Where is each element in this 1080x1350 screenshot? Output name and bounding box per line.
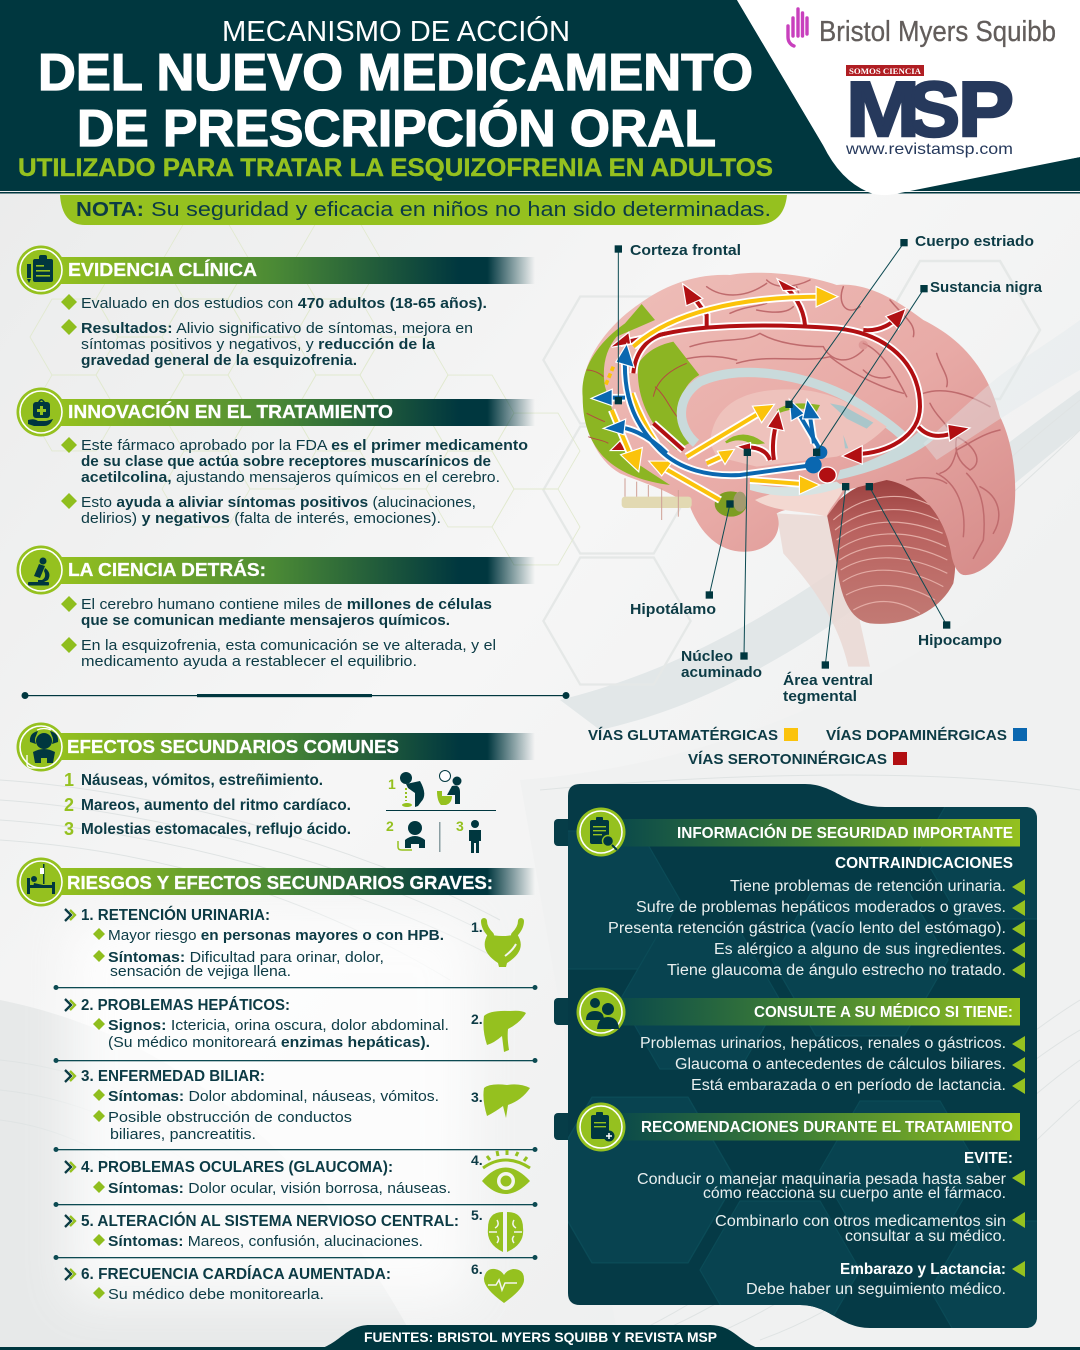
section: recomendaciones: cómo reacciona su cuerpo ante el fármaco. — [703, 1185, 1006, 1202]
icon: liver — [483, 1011, 526, 1052]
risk 6: frecuencia cardíaca: 6. — [471, 1261, 483, 1277]
section: información de seguridad: CONTRAINDICACIONES — [835, 855, 1013, 872]
panel: efectos secundarios comunes: Náuseas, vómitos, estreñimiento. — [81, 772, 323, 789]
icon: gallbladder liver — [483, 1084, 530, 1118]
panel: efectos secundarios comunes: 2 — [64, 795, 74, 815]
icon: clipboard — [27, 255, 53, 283]
brain region labels: Corteza frontal — [630, 242, 741, 259]
risk 3: enfermedad biliar — [65, 1068, 530, 1143]
risk 4: problemas oculares: 4. PROBLEMAS OCULARES (GLAUCOMA): — [81, 1159, 393, 1176]
section: recomendaciones: consultar a su médico. — [845, 1228, 1006, 1245]
risk 4: problemas oculares — [65, 1150, 530, 1197]
panel: efectos secundarios comunes: Mareos, aumento del ritmo cardíaco. — [81, 797, 351, 814]
logo: MSP: www.revistamsp.com — [845, 141, 1013, 158]
red serotonin pathways — [612, 280, 968, 483]
panel: evidencia clínica: síntomas positivos y negativos, y reducción de la — [81, 336, 436, 353]
logo: MSP: M — [846, 65, 920, 153]
section: información de seguridad: INFORMACIÓN DE SEGURIDAD IMPORTANTE — [677, 824, 1013, 842]
icon: bladder — [484, 921, 521, 967]
panel: evidencia clínica: Resultados: Alivio significativo de síntomas, mejora en — [81, 320, 473, 337]
leader lines — [615, 239, 950, 669]
panel: innovación en el tratamiento: de su clase que actúa sobre receptores muscarínicos de — [81, 453, 491, 470]
brain region labels: Hipotálamo — [630, 601, 716, 618]
panel: evidencia clínica — [16, 246, 535, 369]
logo: MSP: SOMOS CIENCIA — [849, 66, 922, 76]
risk 3: enfermedad biliar: 3. — [471, 1089, 483, 1105]
risk 3: enfermedad biliar: 3. ENFERMEDAD BILIAR: — [81, 1068, 265, 1085]
panel: innovación en el tratamiento: acetilcolina, ajustando mensajeros químicos en el cerebro. — [81, 469, 500, 486]
brain region labels: tegmental — [783, 688, 857, 705]
legend: VÍAS DOPAMINÉRGICAS — [826, 727, 1007, 744]
panel: innovación en el tratamiento: delirios) y negativos (falta de interés, emociones). — [81, 510, 441, 527]
section: consulte a su médico: Está embarazada o en período de lactancia. — [691, 1077, 1006, 1094]
panel: la ciencia detrás: medicamento ayuda a restablecer el equilibrio. — [81, 653, 417, 670]
logo: Bristol Myers Squibb — [788, 9, 1056, 48]
brain region labels: Cuerpo estriado — [915, 233, 1034, 250]
risk divider lines — [54, 985, 538, 1260]
divider — [22, 692, 570, 699]
frontal green regions — [582, 304, 699, 485]
panel: riesgos y efectos secundarios graves — [16, 858, 535, 906]
risk 5: sistema nervioso central: Síntomas: Mareos, confusión, alucinaciones. — [108, 1233, 423, 1250]
panel: efectos secundarios comunes: EFECTOS SECUNDARIOS COMUNES — [67, 736, 399, 757]
icon: doctor and patient — [586, 998, 619, 1029]
brain region labels: Sustancia nigra — [930, 279, 1043, 296]
risk 4: problemas oculares: Síntomas: Dolor ocular, visión borrosa, náuseas. — [108, 1180, 451, 1197]
title: DEL NUEVO MEDICAMENTO — [38, 44, 753, 102]
risk 3: enfermedad biliar: Síntomas: Dolor abdominal, náuseas, vómitos. — [108, 1088, 439, 1105]
section: consulte a su médico: CONSULTE A SU MÉDICO SI TIENE: — [754, 1004, 1013, 1021]
panel: evidencia clínica: Evaluado en dos estudios con 470 adultos (18-65 años). — [81, 295, 487, 312]
panel: efectos secundarios comunes: 1 — [64, 770, 74, 790]
panel: evidencia clínica: gravedad general de la esquizofrenia. — [81, 352, 357, 369]
brain region labels — [630, 233, 1043, 705]
panel: evidencia clínica: EVIDENCIA CLÍNICA — [68, 259, 257, 280]
brain region labels: Hipocampo — [918, 632, 1002, 649]
brain stem — [777, 513, 870, 667]
risk 5: sistema nervioso central: 5. — [471, 1207, 483, 1223]
risk 1: retención urinaria: Mayor riesgo en personas mayores o con HPB. — [108, 927, 444, 944]
logo: MSP: P — [958, 65, 1014, 153]
legend: VÍAS GLUTAMATÉRGICAS — [588, 727, 778, 744]
note banner: NOTA: — [76, 199, 144, 221]
title: UTILIZADO PARA TRATAR LA ESQUIZOFRENIA EN ADULTOS — [18, 154, 773, 182]
legend — [588, 727, 1027, 768]
footer sources — [0, 1325, 1080, 1350]
brain region labels: acuminado — [681, 664, 762, 681]
section: información de seguridad: Tiene glaucoma de ángulo estrecho no tratado. — [667, 962, 1006, 979]
brain region labels: Núcleo — [681, 648, 733, 665]
risk 6: frecuencia cardíaca: Su médico debe monitorearla. — [108, 1286, 324, 1303]
icon: clipboard with plus — [591, 1112, 614, 1142]
yellow glutamate pathways — [605, 287, 837, 500]
brain region labels: Área ventral — [783, 672, 873, 689]
title — [18, 15, 773, 182]
risk 5: sistema nervioso central — [65, 1207, 523, 1252]
risk 2: problemas hepáticos: 2. PROBLEMAS HEPÁTICOS: — [81, 997, 290, 1014]
section: información de seguridad: Sufre de problemas hepáticos moderados o graves. — [636, 899, 1006, 916]
risk 6: frecuencia cardíaca: 6. FRECUENCIA CARDÍACA AUMENTADA: — [81, 1266, 391, 1283]
logo: MSP: S — [908, 65, 960, 153]
section: recomendaciones: Embarazo y Lactancia: — [840, 1261, 1006, 1278]
risk 5: sistema nervioso central: 5. ALTERACIÓN AL SISTEMA NERVIOSO CENTRAL: — [81, 1212, 459, 1230]
section: información de seguridad: Tiene problemas de retención urinaria. — [730, 878, 1006, 895]
section: recomendaciones: RECOMENDACIONES DURANTE EL TRATAMIENTO — [641, 1119, 1013, 1136]
panel: innovación en el tratamiento — [16, 388, 535, 527]
panel: efectos secundarios comunes — [16, 722, 535, 853]
icon: hospital bed — [27, 864, 55, 894]
panel: la ciencia detrás: LA CIENCIA DETRÁS: — [68, 559, 266, 580]
risk 1: retención urinaria — [65, 906, 521, 980]
panel: innovación en el tratamiento: Este fármaco aprobado por la FDA es el primer medicamento — [81, 437, 528, 454]
panel: safety information — [554, 784, 1037, 1328]
section: recomendaciones: Debe haber un seguimiento médico. — [746, 1281, 1006, 1298]
side effect pictograms: 3 — [456, 818, 464, 834]
panel: efectos secundarios comunes: Molestias estomacales, reflujo ácido. — [81, 821, 351, 838]
brain illustration — [582, 239, 1080, 669]
side effect pictograms: 2 — [386, 818, 394, 834]
section: consulte a su médico: Glaucoma o antecedentes de cálculos biliares. — [675, 1056, 1006, 1073]
risk 2: problemas hepáticos: Signos: Ictericia, orina oscura, dolor abdominal. — [108, 1017, 449, 1034]
header band — [0, 0, 1080, 195]
icon: eye — [482, 1150, 530, 1194]
risk 1: retención urinaria: 1. RETENCIÓN URINARIA: — [81, 906, 270, 924]
panel: la ciencia detrás: que se comunican mediante mensajeros químicos. — [81, 612, 450, 629]
panel: innovación en el tratamiento: Esto ayuda a aliviar síntomas positivos (alucinaciones, — [81, 494, 476, 511]
legend: VÍAS SEROTONINÉRGICAS — [688, 751, 887, 768]
section: consulte a su médico: Problemas urinarios, hepáticos, renales o gástricos. — [640, 1035, 1006, 1052]
note banner: Su seguridad y eficacia en niños no han sido determinadas. — [151, 199, 771, 221]
icon: heart — [484, 1269, 524, 1303]
note banner — [60, 195, 787, 225]
section: consulte a su médico — [576, 988, 1025, 1094]
side effect pictograms: 1 — [388, 776, 396, 792]
risk 2: problemas hepáticos — [65, 997, 526, 1052]
title: MECANISMO DE ACCIÓN — [222, 15, 570, 48]
icon: brain — [488, 1212, 523, 1252]
panel: la ciencia detrás — [16, 546, 535, 670]
section: información de seguridad — [576, 808, 1025, 979]
logo: Bristol Myers Squibb: Bristol Myers Squibb — [819, 16, 1056, 48]
side effect pictograms — [386, 770, 496, 853]
panel: la ciencia detrás: El cerebro humano contiene miles de millones de células — [81, 596, 492, 613]
risk 1: retención urinaria: sensación de vejiga llena. — [110, 963, 291, 980]
section: recomendaciones: Combinarlo con otros medicamentos sin — [715, 1213, 1006, 1230]
risk 3: enfermedad biliar: Posible obstrucción de conductos — [108, 1109, 352, 1126]
logo: MSP — [845, 65, 1014, 158]
risk 3: enfermedad biliar: biliares, pancreatitis. — [110, 1126, 256, 1143]
section: información de seguridad: Es alérgico a alguno de sus ingredientes. — [714, 941, 1006, 958]
section: recomendaciones: EVITE: — [964, 1150, 1013, 1167]
cerebellum — [827, 478, 955, 624]
section: recomendaciones: Conducir o manejar maquinaria pesada hasta saber — [637, 1171, 1006, 1188]
risk 2: problemas hepáticos: (Su médico monitoreará enzimas hepáticas). — [108, 1034, 430, 1051]
risk 6: frecuencia cardíaca — [65, 1261, 524, 1303]
footer sources: FUENTES: BRISTOL MYERS SQUIBB Y REVISTA MSP — [364, 1329, 717, 1345]
translucent swoosh over the occipital lobe — [923, 320, 1080, 460]
panel: riesgos y efectos secundarios graves: RIESGOS Y EFECTOS SECUNDARIOS GRAVES: — [67, 872, 493, 893]
risk 4: problemas oculares: 4. — [471, 1152, 483, 1168]
risk 1: retención urinaria: 1. — [471, 919, 483, 935]
risk 1: retención urinaria: Síntomas: Dificultad para orinar, dolor, — [108, 949, 384, 966]
icon: microscope — [28, 558, 49, 586]
nucleus green areas — [715, 403, 820, 517]
risk 2: problemas hepáticos: 2. — [471, 1011, 483, 1027]
panel: efectos secundarios comunes: 3 — [64, 819, 74, 839]
icon: clipboard and magnifier — [590, 817, 617, 850]
section: información de seguridad: Presenta retención gástrica (vacío lento del estómago). — [608, 920, 1006, 937]
panel: la ciencia detrás: En la esquizofrenia, esta comunicación se ve alterada, y el — [81, 637, 496, 654]
panel: innovación en el tratamiento: INNOVACIÓN EN EL TRATAMIENTO — [68, 401, 393, 422]
section: recomendaciones — [576, 1102, 1025, 1298]
cerebrum — [583, 273, 1015, 575]
title: DE PRESCRIPCIÓN ORAL — [77, 100, 716, 158]
icon: hand with medicine bag — [28, 399, 53, 426]
icon: patient with stethoscope — [27, 728, 58, 768]
corpus callosum and ventricle — [681, 372, 937, 496]
temporal shadow and olfactory bulb — [622, 478, 847, 520]
blue dopamine pathways — [593, 345, 827, 475]
